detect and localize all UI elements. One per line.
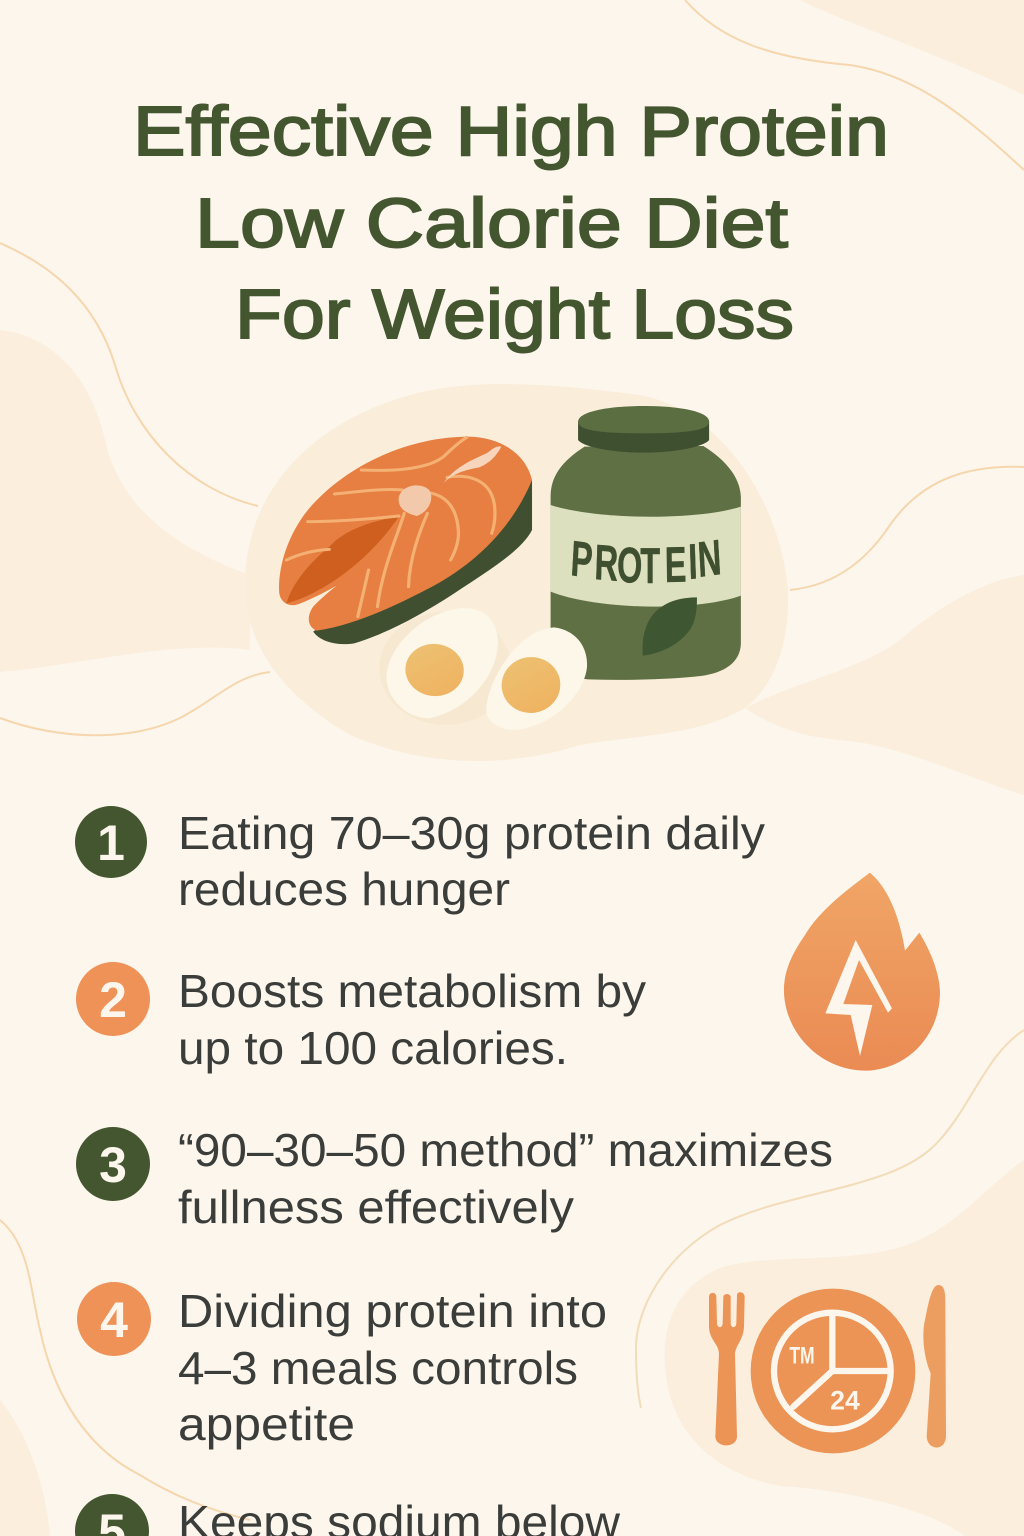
title	[133, 92, 889, 353]
plate labels: TM	[789, 1342, 815, 1369]
title: Low Calorie Diet	[195, 184, 788, 262]
fork	[709, 1292, 745, 1445]
list item 4: Dividing protein into	[178, 1285, 607, 1337]
plate	[751, 1289, 915, 1453]
protein jar	[551, 406, 741, 680]
salmon steak	[279, 437, 532, 644]
title: Effective High Protein	[133, 92, 889, 170]
list item 1: Eating 70–30g protein daily	[178, 807, 765, 859]
illustration: salmon, eggs, protein jar	[279, 406, 741, 730]
jar label text: PROTEIN	[569, 529, 723, 594]
list item 1	[75, 806, 765, 915]
list item 1: reduces hunger	[178, 863, 510, 915]
plate labels: 24	[830, 1385, 860, 1415]
list item 4	[77, 1282, 607, 1450]
list item 2: up to 100 calories.	[178, 1022, 568, 1074]
list item 4: 4	[100, 1292, 128, 1348]
list item 2: 2	[99, 972, 127, 1028]
list item 2	[76, 962, 646, 1074]
list item 4: 4–3 meals controls	[178, 1342, 578, 1394]
icon: plate with fork and knife	[709, 1285, 946, 1453]
icon: flame with bolt	[784, 873, 940, 1071]
leaf	[643, 597, 697, 656]
list item 1: 1	[97, 815, 125, 871]
jar lid	[578, 406, 709, 453]
list item 3: fullness effectively	[178, 1181, 574, 1233]
list item 3: 3	[99, 1137, 127, 1193]
plate labels	[789, 1342, 860, 1415]
list item 3	[76, 1124, 833, 1233]
knife	[923, 1285, 946, 1448]
list item 4: appetite	[178, 1398, 355, 1450]
boiled egg right	[486, 627, 587, 730]
list item 2: Boosts metabolism by	[178, 965, 646, 1017]
list item 3: “90–30–50 method” maximizes	[178, 1124, 833, 1176]
title: For Weight Loss	[235, 275, 794, 353]
boiled egg left	[379, 608, 511, 725]
